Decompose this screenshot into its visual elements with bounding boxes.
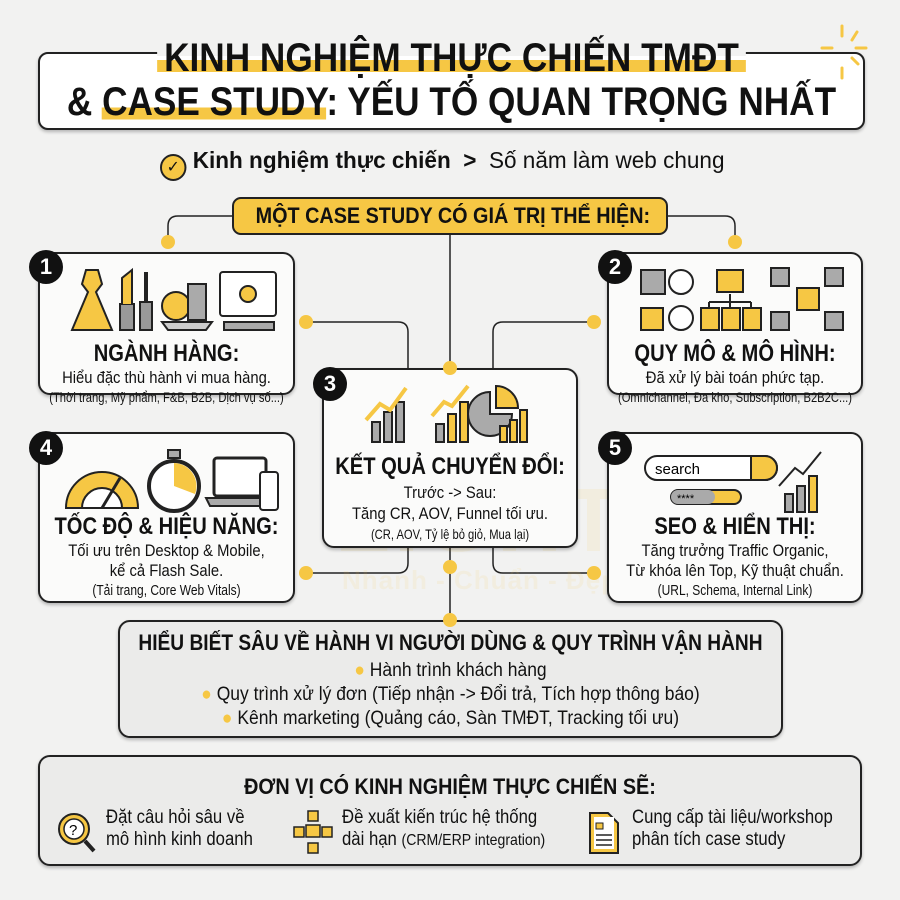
panel 5 [607,432,863,603]
heading: ĐƠN VỊ CÓ KINH NGHIỆM THỰC CHIẾN SẼ: [244,774,656,799]
heading: seo: SEO & HIỂN THỊ: [654,513,816,540]
item 3: phân tích case study [632,829,785,850]
icon: sparkle [820,24,868,80]
icons: models [640,267,844,331]
bullet list: ● Hành trình khách hàng [354,660,547,681]
item 2 [293,807,545,854]
text: 5 [609,435,621,460]
title line 2: & CASE STUDY: YẾU TỐ QUAN TRỌNG NHẤT [67,80,836,124]
bullet list [201,660,700,729]
item 3: Cung cấp tài liệu/workshop [632,807,833,828]
title box [38,52,865,130]
item 3 [589,807,833,854]
panel 5: Tăng trưởng Traffic Organic, [641,541,829,560]
panel 4: Tối ưu trên Desktop & Mobile, [68,541,265,560]
heading: toc do: TỐC ĐỘ & HIỆU NĂNG: [54,513,278,540]
text: 2 [609,254,621,279]
icons: growth charts [364,384,528,443]
yellow pill heading [232,197,668,235]
item 2: Đề xuất kiến trúc hệ thống [342,807,537,828]
text: 4 [40,435,52,460]
panel 1 [38,252,295,395]
text: (Thời trang, Mỹ phẩm, F&B, B2B, Dịch vụ số...) [49,389,284,405]
panel 2: Đã xử lý bài toán phức tạp. [646,368,824,387]
panel 3: Trước -> Sau: [404,483,496,502]
icons: industries [70,268,277,331]
subtitle: ✓ [167,159,180,176]
item 2: dài hạn (CRM/ERP integration) [342,829,545,850]
heading: nganh hang: NGÀNH HÀNG: [94,340,239,367]
panel 4: (Tải trang, Core Web Vitals) [92,582,241,599]
panel 4 [38,432,295,603]
item 1: mô hình kinh doanh [106,829,253,850]
icons: seo [644,451,822,513]
bullet list: ● Kênh marketing (Quảng cáo, Sàn TMĐT, Tracking tối ưu) [222,708,679,729]
icons: seo: search [655,461,700,478]
panel: practitioner units [38,755,862,866]
watermark logo: LIGHT [335,471,625,571]
item 1 [58,807,253,852]
panel 2 [607,252,863,395]
title line 1: KINH NGHIỆM THỰC CHIẾN TMĐT [164,36,739,80]
subtitle: Kinh nghiệm thực chiến > Số năm làm web chung [193,147,725,173]
heading: HIỂU BIẾT SÂU VỀ HÀNH VI NGƯỜI DÙNG & QUY TRÌNH VẬN HÀNH [138,630,763,655]
watermark logo: Nhanh - Chuẩn - Đẹp [342,565,618,595]
item 1: Đặt câu hỏi sâu về [106,807,244,828]
panel 5: Từ khóa lên Top, Kỹ thuật chuẩn. [626,561,844,580]
bullet list: ● Quy trình xử lý đơn (Tiếp nhận -> Đổi trả, Tích hợp thông báo) [201,684,700,705]
item 1: ? [69,822,77,839]
text: (Omnichannel, Đa kho, Subscription, B2B2C...) [618,389,852,405]
panel 4: kể cả Flash Sale. [110,561,223,580]
panel 5: (URL, Schema, Internal Link) [658,582,812,599]
heading: ket qua: KẾT QUẢ CHUYỂN ĐỔI: [335,453,565,480]
heading: quy mo: QUY MÔ & MÔ HÌNH: [634,340,836,367]
text: 1 [40,254,52,279]
panel 3: Tăng CR, AOV, Funnel tối ưu. [352,504,548,523]
panel 1: Hiểu đặc thù hành vi mua hàng. [62,368,271,387]
icons: seo: **** [677,493,695,505]
text: 3 [324,371,336,396]
icons: speed [65,449,279,513]
yellow pill heading: MỘT CASE STUDY CÓ GIÁ TRỊ THỂ HIỆN: [256,203,650,228]
panel 3: (CR, AOV, Tỷ lệ bỏ giỏ, Mua lại) [371,526,529,542]
panel: user behavior [118,620,783,738]
panel 3 [322,368,578,548]
